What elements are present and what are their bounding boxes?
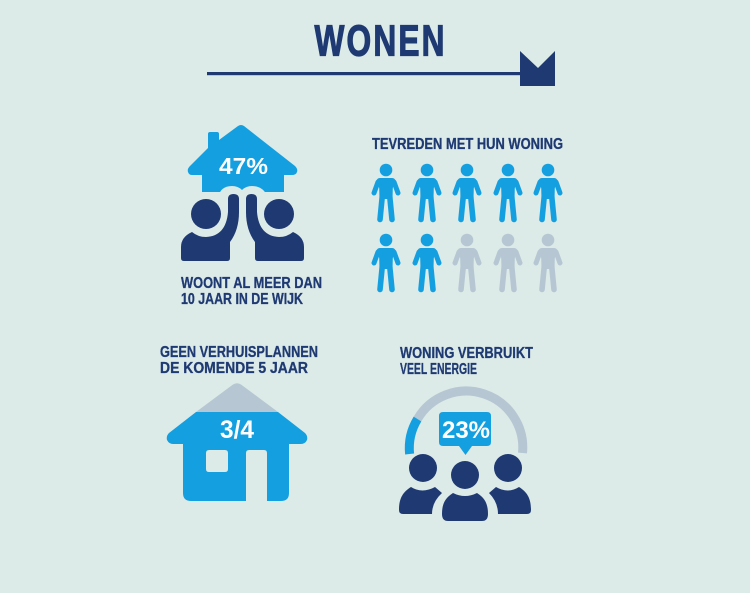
- text: geen verhuisplannen: GEEN VERHUISPLANNEN: [160, 344, 318, 361]
- icon: house held up by two people, 47%: 47%: [219, 153, 268, 179]
- text: woning verbruikt veel energie: WONING VERBRUIKT: [400, 345, 533, 362]
- title rule with bookmark: [207, 51, 555, 86]
- icon: house held up by two people, 47%: [181, 125, 304, 261]
- icon: house three quarters filled: [167, 383, 307, 501]
- pictogram: 7 of 10 people: [374, 164, 560, 290]
- text: geen verhuisplannen: [160, 344, 318, 377]
- text: woning verbruikt veel energie: [400, 345, 533, 378]
- text: woont al meer dan 10 jaar: [181, 275, 322, 308]
- title: WONEN: [314, 16, 447, 66]
- text: woont al meer dan 10 jaar: WOONT AL MEER DAN: [181, 275, 322, 292]
- heading: tevreden met hun woning: TEVREDEN MET HUN WONING: [372, 136, 563, 153]
- icon: gauge with people, 23%: 23%: [442, 417, 490, 444]
- text: woont al meer dan 10 jaar: 10 JAAR IN DE WIJK: [181, 291, 304, 308]
- icon: gauge with people, 23%: [399, 391, 531, 521]
- icon: house three quarters filled: 3/4: [220, 416, 254, 444]
- text: geen verhuisplannen: DE KOMENDE 5 JAAR: [160, 360, 308, 377]
- text: woning verbruikt veel energie: VEEL ENERGIE: [400, 361, 477, 378]
